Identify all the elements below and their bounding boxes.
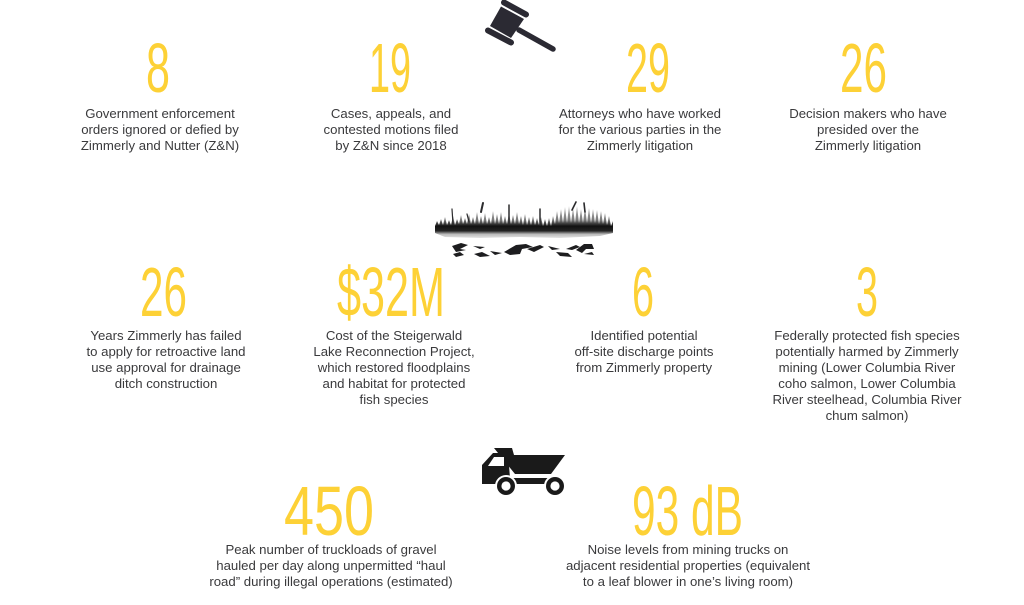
text: decision makers: Zimmerly litigation (815, 138, 921, 153)
text: reconnection project cost (313, 328, 475, 407)
text: reconnection project cost: Cost of the Steigerwald (326, 328, 462, 343)
text: discharge points (574, 328, 714, 375)
text: enforcement orders: Zimmerly and Nutter (Z&N) (81, 138, 239, 153)
text: noise levels: to a leaf blower in one’s living room) (583, 574, 793, 589)
text: discharge points: Identified potential (590, 328, 698, 343)
text: protected fish species: chum salmon) (826, 408, 908, 423)
text: reconnection project cost: and habitat for protected (323, 376, 465, 391)
text: years failed to apply: to apply for retroactive land (86, 344, 246, 359)
text: protected fish species: potentially harmed by Zimmerly (775, 344, 959, 359)
text: attorneys: Attorneys who have worked (559, 106, 721, 121)
text: truckloads (209, 542, 453, 589)
text: enforcement orders: Government enforcement (85, 106, 235, 121)
text: years failed to apply (86, 328, 246, 391)
icon: gavel (485, 0, 556, 52)
text: reconnection project cost: which restored floodplains (318, 360, 470, 375)
text: years failed to apply: use approval for drainage (91, 360, 241, 375)
text: cases: Cases, appeals, and (331, 106, 451, 121)
big number: 26 years: 26 (140, 253, 187, 330)
text: cases: by Z&N since 2018 (335, 138, 447, 153)
text: attorneys (558, 106, 721, 153)
text: decision makers: presided over the (817, 122, 919, 137)
text: cases (324, 106, 458, 153)
text: protected fish species: mining (Lower Columbia River (779, 360, 955, 375)
icon: wetland grass and fish (435, 201, 613, 257)
text: truckloads: road” during illegal operations (estimated) (209, 574, 453, 589)
text: decision makers (789, 106, 947, 153)
text: discharge points: off-site discharge points (574, 344, 714, 359)
big number: $32M: $32M (337, 253, 445, 330)
text: attorneys: for the various parties in the (559, 122, 721, 137)
big number: 3: 3 (856, 253, 878, 330)
text: years failed to apply: ditch construction (115, 376, 217, 391)
text: reconnection project cost: fish species (360, 392, 428, 407)
text: cases: contested motions filed (324, 122, 458, 137)
text: noise levels (566, 542, 810, 589)
text: protected fish species: River steelhead, Columbia River (772, 392, 962, 407)
text: truckloads: Peak number of truckloads of gravel (225, 542, 437, 557)
text: attorneys: Zimmerly litigation (587, 138, 693, 153)
text: decision makers: Decision makers who have (789, 106, 947, 121)
text: enforcement orders (81, 106, 239, 153)
text: years failed to apply: Years Zimmerly has failed (90, 328, 242, 343)
text: noise levels: Noise levels from mining trucks on (588, 542, 788, 557)
text: discharge points: from Zimmerly property (576, 360, 712, 375)
text: protected fish species: coho salmon, Lower Columbia (778, 376, 956, 391)
text: truckloads: hauled per day along unpermitted “haul (216, 558, 446, 573)
text: noise levels: adjacent residential properties (equivalent (566, 558, 810, 573)
text: protected fish species: Federally protected fish species (774, 328, 960, 343)
big number: 6: 6 (632, 253, 654, 330)
text: reconnection project cost: Lake Reconnection Project, (313, 344, 475, 359)
text: protected fish species (772, 328, 962, 423)
text: enforcement orders: orders ignored or defied by (81, 122, 239, 137)
